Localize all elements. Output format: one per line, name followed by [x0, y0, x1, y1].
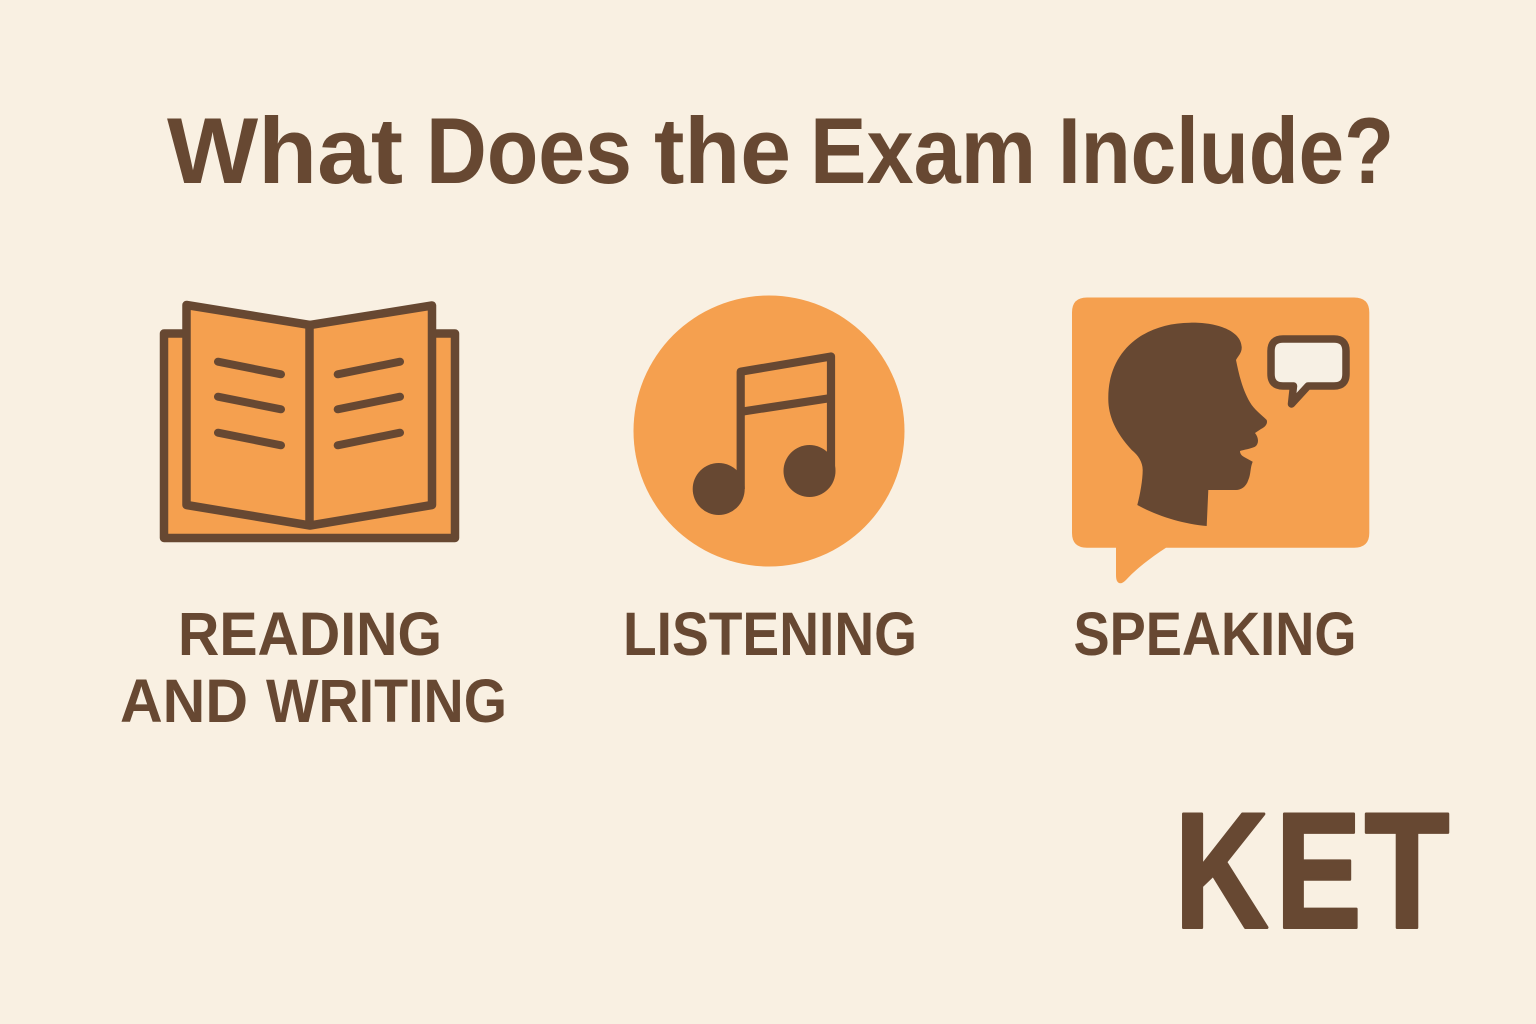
title [167, 98, 1394, 203]
icon: open book [164, 305, 455, 538]
label: reading and writing: WRITING [266, 667, 507, 735]
title: What [167, 98, 403, 203]
label: listening: LISTENING [623, 600, 917, 668]
label: reading and writing: READING [178, 600, 442, 668]
label: reading and writing [120, 600, 507, 735]
label: KET: E [1276, 778, 1362, 962]
title: Does [426, 98, 632, 203]
label: KET [1174, 778, 1450, 962]
label: KET: T [1364, 778, 1450, 962]
icon: speaking head [1072, 298, 1369, 583]
title: Include? [1058, 98, 1394, 203]
label: speaking: SPEAKING [1074, 600, 1356, 668]
label: KET: K [1174, 778, 1268, 962]
title: the [654, 98, 791, 203]
label: reading and writing: AND [120, 667, 248, 735]
icon: music note [634, 296, 904, 566]
title: Exam [810, 98, 1036, 203]
